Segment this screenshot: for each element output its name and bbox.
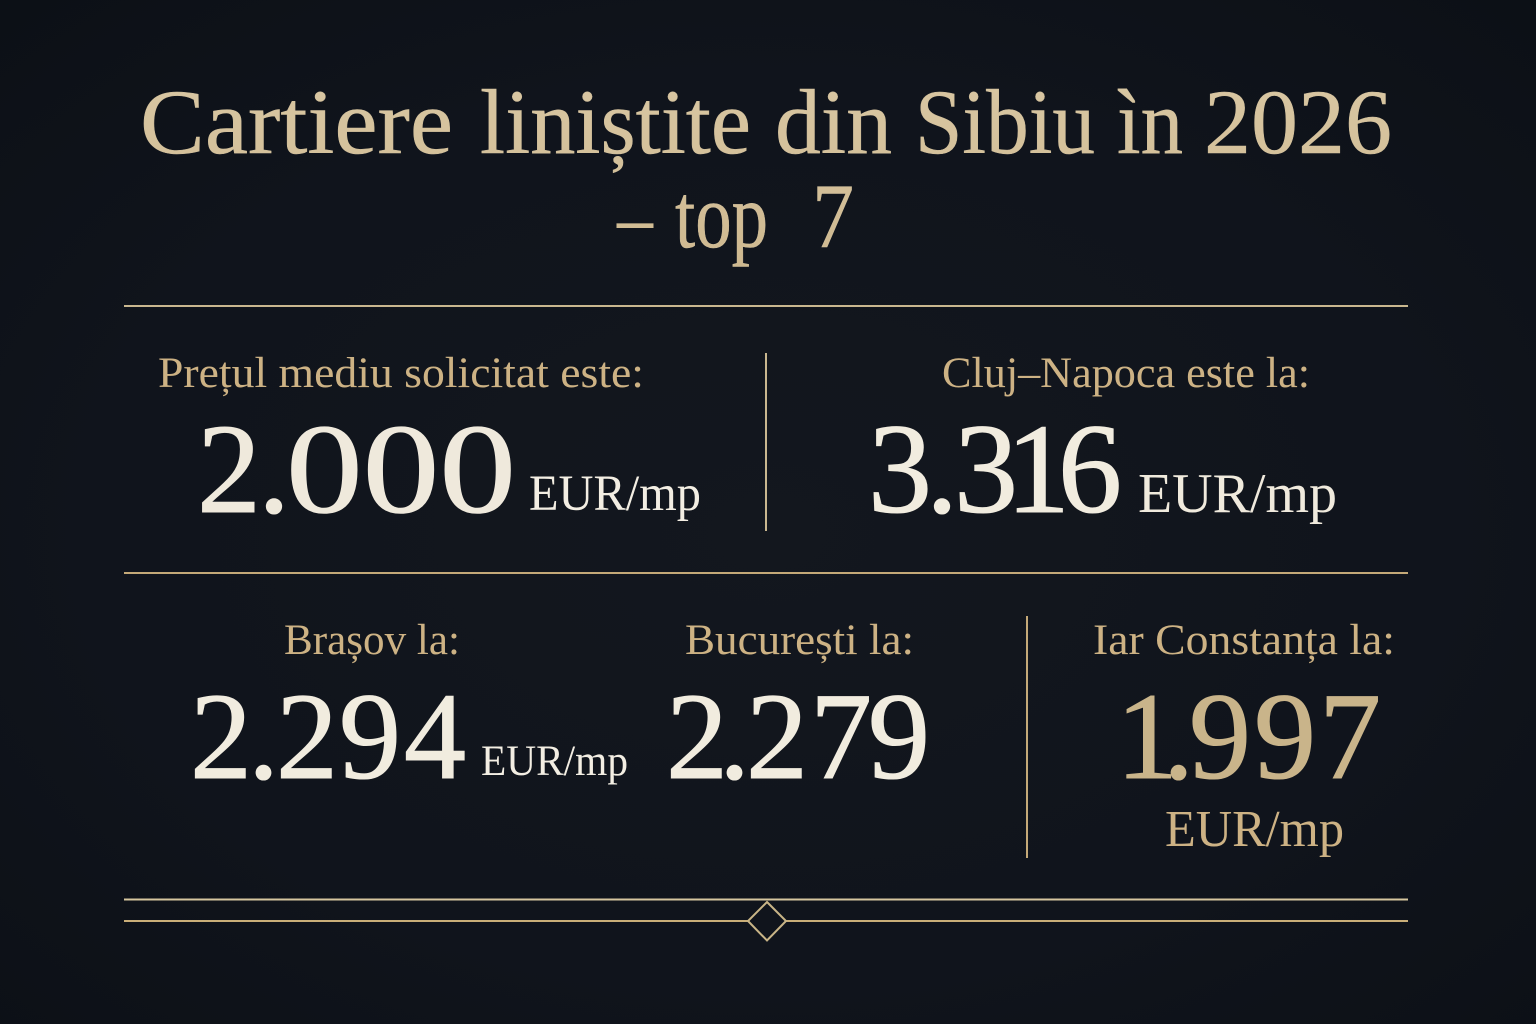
stat: Cluj-Napoca: Cluj–Napoca este la: bbox=[942, 350, 1310, 397]
stat: Cluj-Napoca: 3.316 bbox=[868, 398, 1122, 540]
stat: average asking price: 2. bbox=[197, 398, 290, 540]
title: Cartiere bbox=[140, 71, 453, 173]
stat: București: 2.279 bbox=[666, 668, 930, 805]
stat: Brașov bbox=[190, 617, 628, 805]
stat: Cluj-Napoca bbox=[868, 350, 1337, 540]
stat: Constanța: Iar Constanța la: bbox=[1093, 617, 1395, 664]
stat: Constanța: 1.997 bbox=[1116, 668, 1381, 805]
title bbox=[140, 71, 1392, 267]
title: din bbox=[775, 71, 892, 173]
title: liniștite bbox=[480, 71, 751, 173]
title: Sibiu bbox=[915, 71, 1095, 173]
stat: average asking price: 000 bbox=[286, 398, 516, 540]
stat: Brașov: Brașov la: bbox=[284, 617, 460, 664]
title: – bbox=[616, 165, 654, 267]
stat: Cluj-Napoca: EUR/mp bbox=[1138, 463, 1337, 525]
ornament: double rule with diamond bbox=[124, 900, 1408, 940]
title: 2026 bbox=[1204, 71, 1392, 173]
stat: average asking price bbox=[158, 350, 701, 540]
stat: Brașov: EUR/mp bbox=[481, 738, 628, 785]
title: 7 bbox=[812, 165, 854, 267]
stat: Brașov: 2.294 bbox=[190, 668, 466, 805]
title: ìn bbox=[1117, 71, 1183, 173]
title: top bbox=[675, 165, 768, 267]
stat: București: București la: bbox=[685, 617, 914, 664]
stat: Constanța: EUR/mp bbox=[1165, 801, 1344, 858]
stat: Constanța bbox=[1093, 617, 1395, 858]
stat: average asking price: EUR/mp bbox=[529, 466, 701, 522]
stat: average asking price: Prețul mediu solicitat este: bbox=[158, 350, 644, 397]
